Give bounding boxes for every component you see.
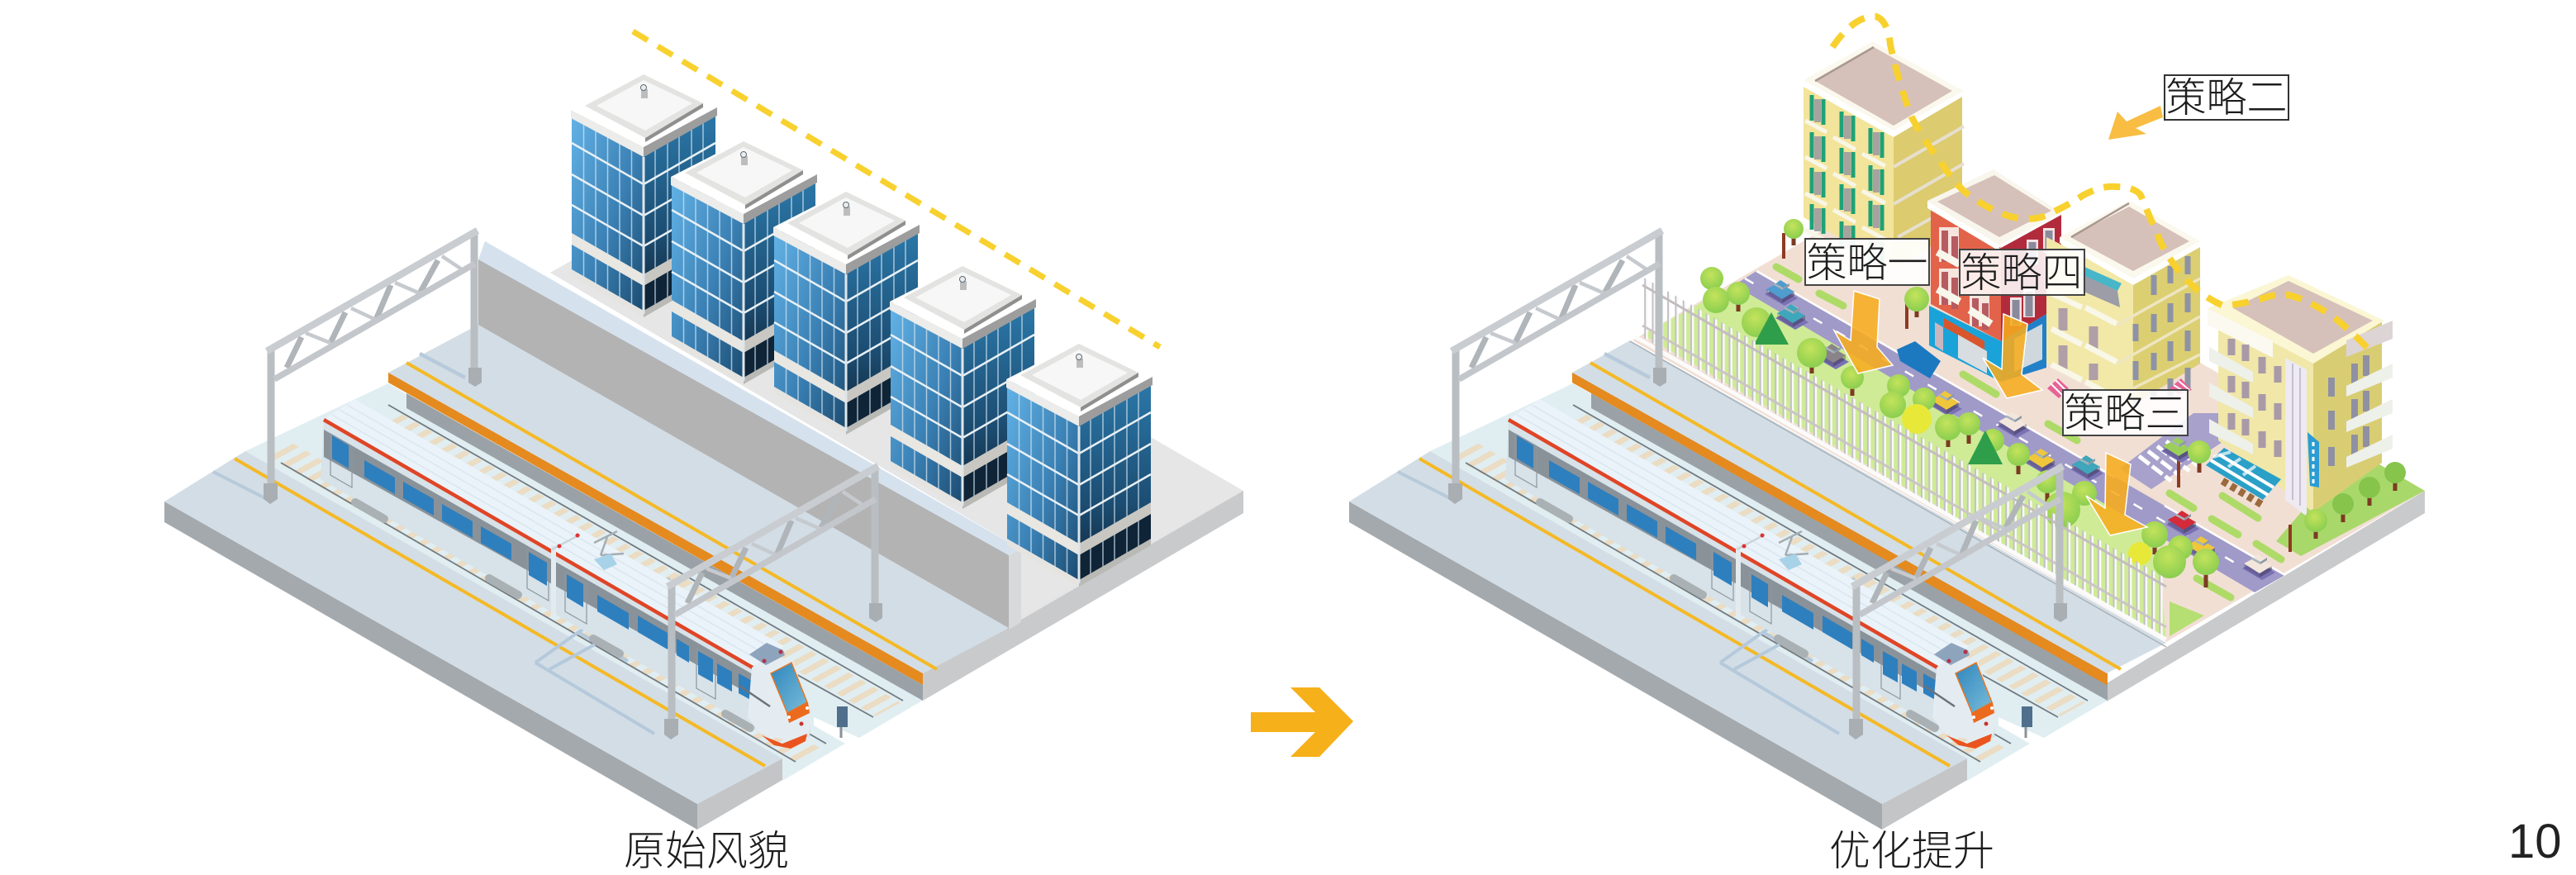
label: strategy two: 策略二 [2165,76,2288,121]
fence [1630,277,2166,647]
blue truck [1897,341,1941,378]
front gantry [1849,466,2067,739]
label: strategy four: 策略四 [1961,251,2083,296]
railway and train [164,373,924,830]
street trees [1700,219,2406,587]
platform orange edge [1572,373,2107,685]
right cream building [2206,275,2393,516]
platform yellow line [406,363,937,669]
arrow: strategy three [2086,453,2147,535]
hedges [1776,267,2281,597]
rear gantry [264,231,482,504]
sidewalk surface [1633,188,2425,642]
caption: original appearance: 原始风貌 [624,828,789,874]
wall top [478,241,1021,555]
lower green corner [2170,602,2204,636]
curved yellow dashed skyline [1832,17,2370,351]
middle platform [388,325,1009,673]
road markings [1745,278,2270,583]
grey wall [478,259,1009,630]
arrow: strategy two [2108,106,2163,140]
cars on road [1765,280,2275,580]
arrow: before to after [1251,687,1353,757]
middle yellow building [2046,201,2200,407]
platform yellow line [1590,363,2121,669]
middle platform [1572,340,2166,673]
red building [1927,169,2061,382]
gantry shadow on platform [1604,354,1650,378]
front gantry [664,466,882,739]
label: strategy one: 策略一 [1806,241,1928,286]
base right side face [923,491,1243,701]
striped pink awnings [2047,378,2192,398]
yellow dashed skyline [633,31,1160,347]
panel: improved scene [1349,17,2425,830]
page number: 10 [2508,815,2562,868]
main road [1734,271,2285,592]
panel: original scene [164,31,1243,830]
gantry shadow on platform [420,354,465,378]
back ground slab [550,182,1243,701]
street lamps [1784,233,2290,552]
arrow: strategy one [1834,291,1893,373]
arrow: strategy four [1983,314,2042,398]
tall yellow building [1804,41,1964,269]
ground in front of wall [923,491,1243,673]
cross street [2120,413,2222,489]
crosswalk [2139,441,2198,481]
road curb [1756,271,2285,575]
railway and train [1349,373,2108,830]
green verge along fence [1642,285,2166,639]
caption: optimized upgrade: 优化提升 [1829,828,1994,874]
right green strip [2276,464,2425,556]
wall end [1009,549,1021,630]
tower row [571,73,1153,587]
label: strategy three: 策略三 [2064,392,2186,436]
base side face [2107,491,2425,701]
rear gantry [1448,231,1666,504]
